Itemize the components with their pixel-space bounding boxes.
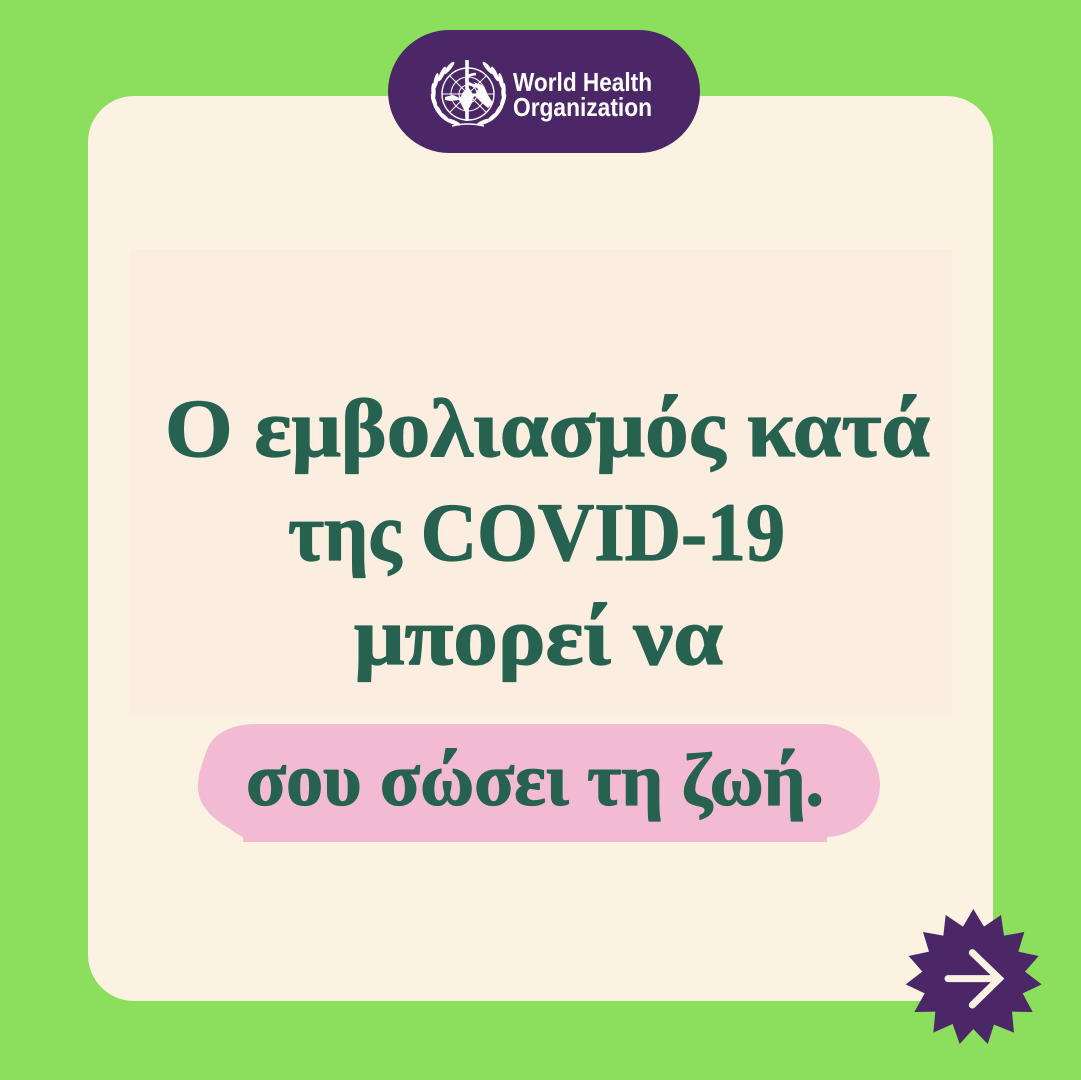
logo wordmark: World Health [513,67,652,97]
panel: cream card [88,96,993,1001]
heading: headline text: Ο εμβολιασμός κατά [165,382,930,474]
heading: headline text: της COVID-19 [288,486,785,578]
icon: next arrow badge [906,909,1042,1044]
panel: headline backdrop [129,249,952,716]
highlight: pink callout [198,724,880,842]
logo wordmark [513,67,652,122]
logo wordmark: Organization [513,92,652,122]
highlight text: σου σώσει τη ζωή. [246,739,824,822]
badge: WHO logo [388,30,700,153]
heading: headline text [165,382,930,682]
icon: WHO emblem [429,60,508,127]
heading: headline text: μπορεί να [354,590,723,682]
